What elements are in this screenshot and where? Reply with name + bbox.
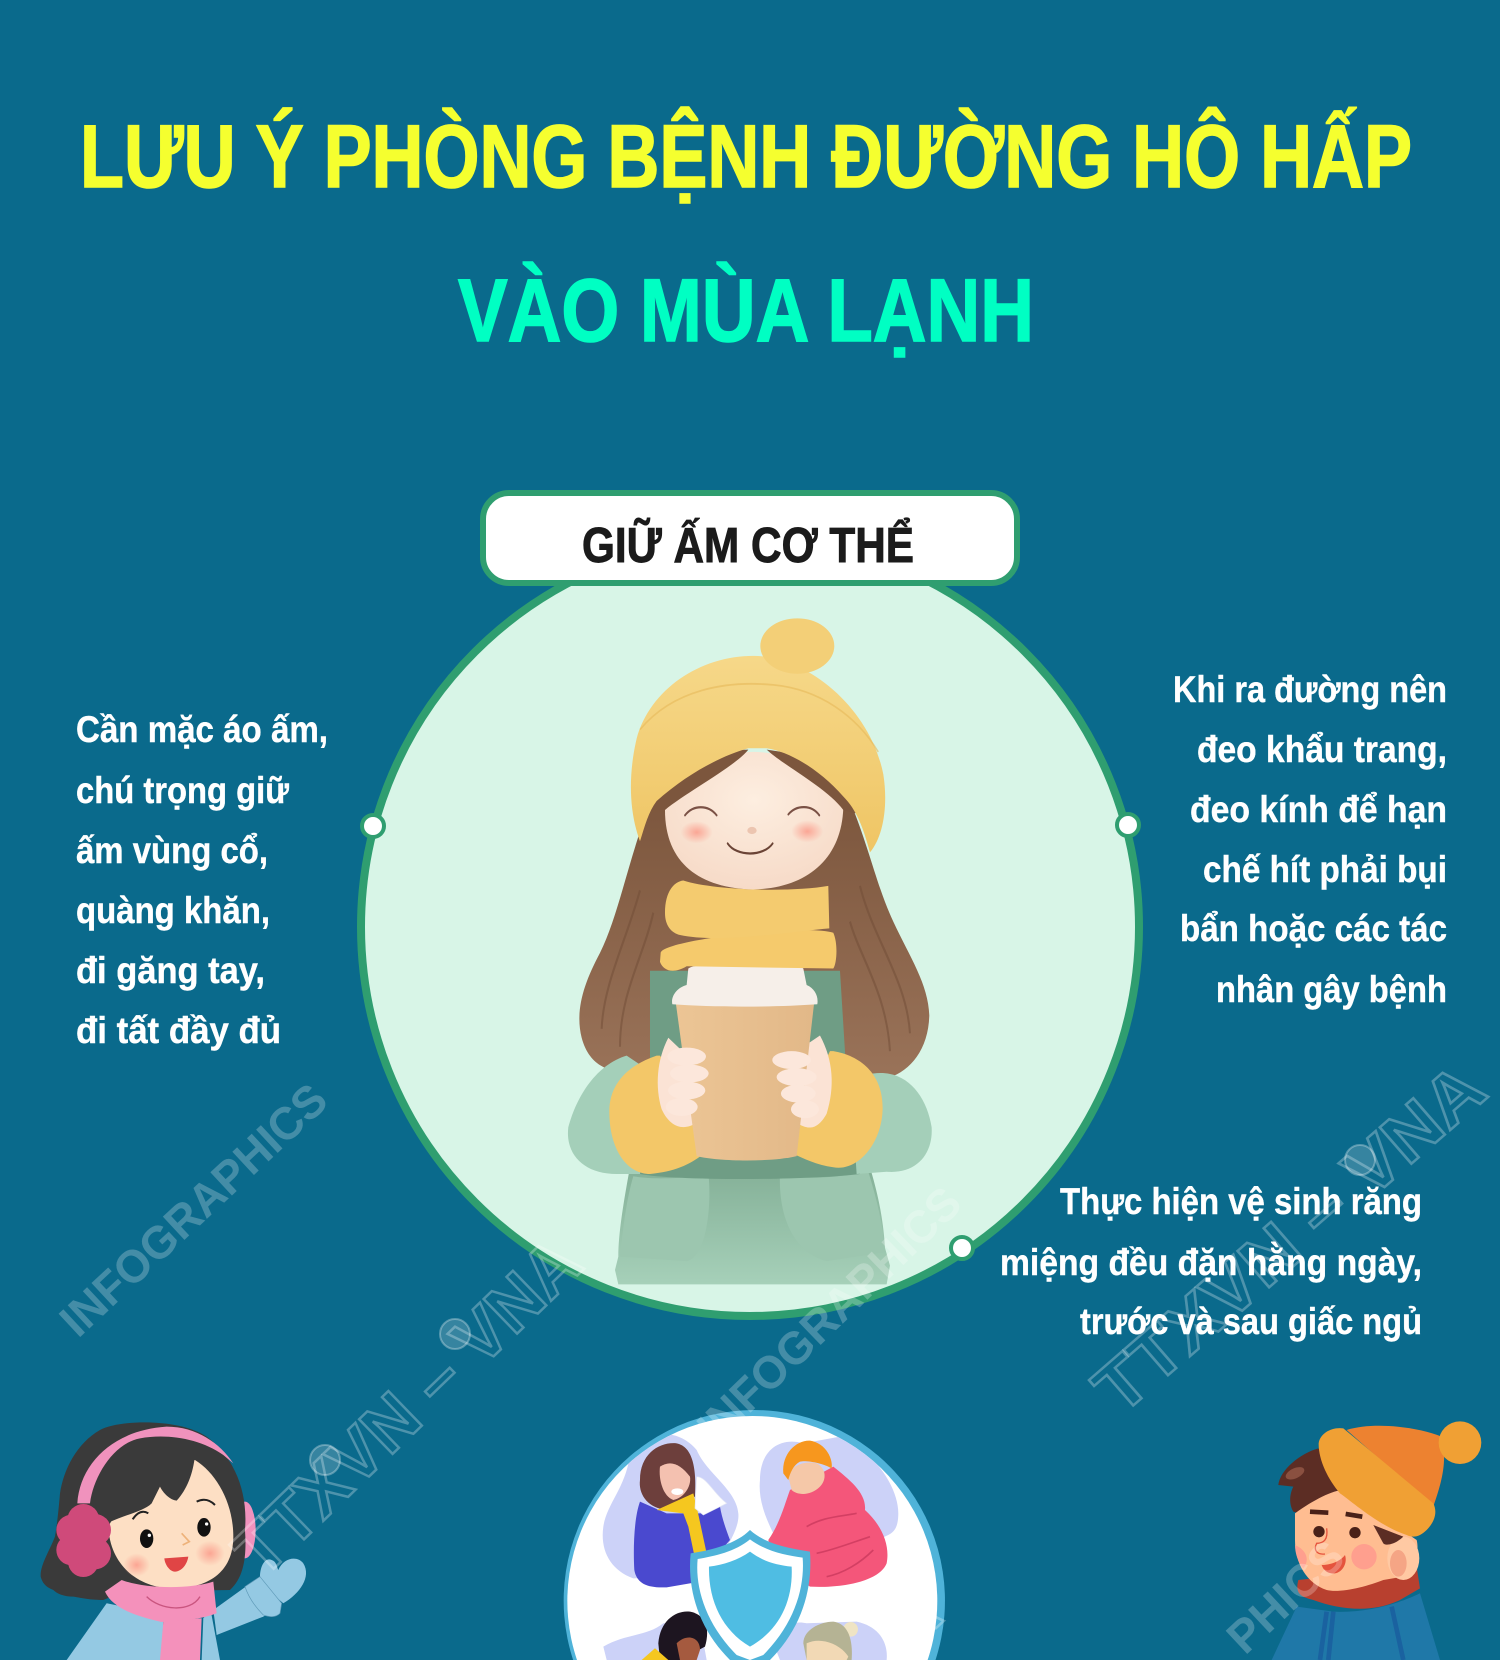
watermarks: TTXVN – VNA xyxy=(1079,1048,1500,1428)
illustration: girl holding a cup xyxy=(568,618,932,1284)
watermarks: INFOGRAPHICS xyxy=(49,1073,337,1346)
text block: left xyxy=(76,709,328,1051)
heading label: GIỮ ẤM CƠ THỂ xyxy=(483,493,1017,583)
panel: main circle with illustration xyxy=(361,538,1139,1316)
text block: right: bẩn hoặc các tác xyxy=(1180,908,1447,949)
text block: right: Khi ra đường nên xyxy=(1173,669,1447,710)
text block: lower right: miệng đều đặn hằng ngày, xyxy=(1000,1241,1422,1283)
circle background xyxy=(564,1410,945,1660)
watermarks: INFOGRAPHICS xyxy=(687,1176,971,1453)
text block: lower right: trước và sau giấc ngủ xyxy=(1080,1301,1422,1342)
text block: left: quàng khăn, xyxy=(76,890,270,931)
text block: lower right: Thực hiện vệ sinh răng xyxy=(1060,1181,1422,1222)
text block: right xyxy=(1173,669,1447,1010)
text block: left: đi găng tay, xyxy=(76,950,265,991)
text block: left: ấm vùng cổ, xyxy=(76,830,268,871)
text block: right: chế hít phải bụi xyxy=(1203,849,1447,890)
connector dots xyxy=(362,814,1139,1259)
text block: right: nhân gây bệnh xyxy=(1216,969,1447,1010)
text block: left: đi tất đầy đủ xyxy=(76,1010,281,1051)
icon: sick people and shield circle xyxy=(564,1410,945,1660)
circle background xyxy=(361,538,1139,1316)
watermarks: PHICS xyxy=(1216,1530,1354,1660)
icon: shield xyxy=(690,1530,810,1660)
watermarks xyxy=(49,1048,1500,1660)
heading label: GIỮ ẤM CƠ THỂ: GIỮ ẤM CƠ THỂ xyxy=(582,518,914,573)
text block: right: đeo kính để hạn xyxy=(1190,789,1447,830)
icon: cartoon boy with orange hat xyxy=(1272,1421,1481,1660)
person: man in blanket xyxy=(760,1437,898,1587)
person: bottom left xyxy=(603,1611,707,1660)
text block: right: đeo khẩu trang, xyxy=(1197,729,1447,770)
watermarks: TTXVN – VNA xyxy=(218,1222,596,1591)
person: woman with tissue xyxy=(603,1434,738,1587)
title xyxy=(80,106,1412,360)
text block: left: Cần mặc áo ấm, xyxy=(76,709,328,750)
person: bottom right xyxy=(773,1622,887,1660)
title: VÀO MÙA LẠNH xyxy=(458,260,1034,360)
text block: lower right xyxy=(1000,1181,1422,1342)
icon: cartoon girl with earmuffs xyxy=(41,1422,306,1660)
text block: left: chú trọng giữ xyxy=(76,770,289,811)
